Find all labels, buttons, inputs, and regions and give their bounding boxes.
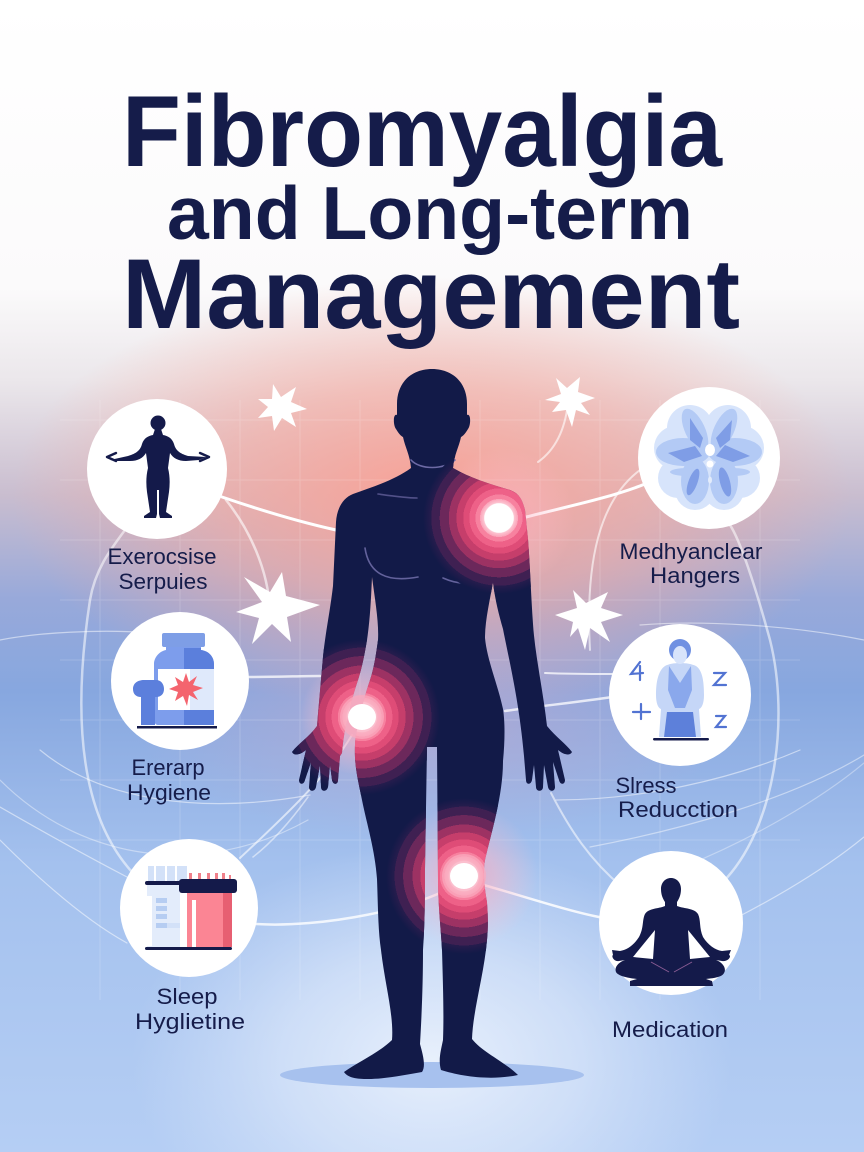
- connector lines: [0, 403, 864, 943]
- label: brain: Medhyanclear: [620, 539, 762, 564]
- label: stress: Slress: [616, 773, 676, 798]
- pain point: wrist: [284, 639, 440, 795]
- icon: meditating figure: [612, 878, 731, 986]
- label: exercise: Exerocsise: [108, 544, 216, 569]
- sparkle stars: [236, 377, 623, 650]
- body silhouette: [292, 369, 572, 1079]
- label: sleep: [135, 984, 245, 1034]
- panel: bottle: [111, 612, 249, 750]
- label: stress: [616, 773, 738, 822]
- label: sleep: Hyglietine: [135, 1009, 245, 1034]
- label: bottle: [127, 755, 211, 805]
- panel: sleep: [120, 839, 258, 977]
- label: stress: Reducction: [618, 797, 738, 822]
- icon: stressed person: [631, 639, 726, 740]
- pain point: shoulder: [426, 456, 562, 594]
- label: exercise: [108, 544, 216, 594]
- label: sleep: Sleep: [156, 984, 218, 1009]
- label: brain: Hangers: [650, 563, 740, 588]
- label: bottle: Ererarp: [132, 755, 204, 780]
- title: and Long-term: [167, 171, 693, 255]
- icon: stretching figure: [107, 416, 209, 518]
- icon: medicine bottle: [133, 633, 217, 728]
- body contour details: [365, 460, 497, 583]
- title: Fibromyalgia: [122, 76, 723, 188]
- icon: containers: [145, 866, 237, 950]
- pain point: knee: [390, 802, 530, 951]
- icon: brain flower: [654, 405, 764, 510]
- title: Management: [122, 238, 740, 349]
- ground shadow: [280, 1062, 584, 1088]
- panel: brain: [638, 387, 780, 529]
- panel: stress: [609, 624, 751, 766]
- label: medication: Medication: [612, 1017, 728, 1042]
- panel: exercise: [87, 399, 227, 539]
- title: [122, 76, 740, 349]
- label: bottle: Hygiene: [127, 780, 211, 805]
- label: exercise: Serpuies: [118, 569, 208, 594]
- label: brain: [620, 539, 762, 588]
- panel: meditation: [599, 851, 743, 995]
